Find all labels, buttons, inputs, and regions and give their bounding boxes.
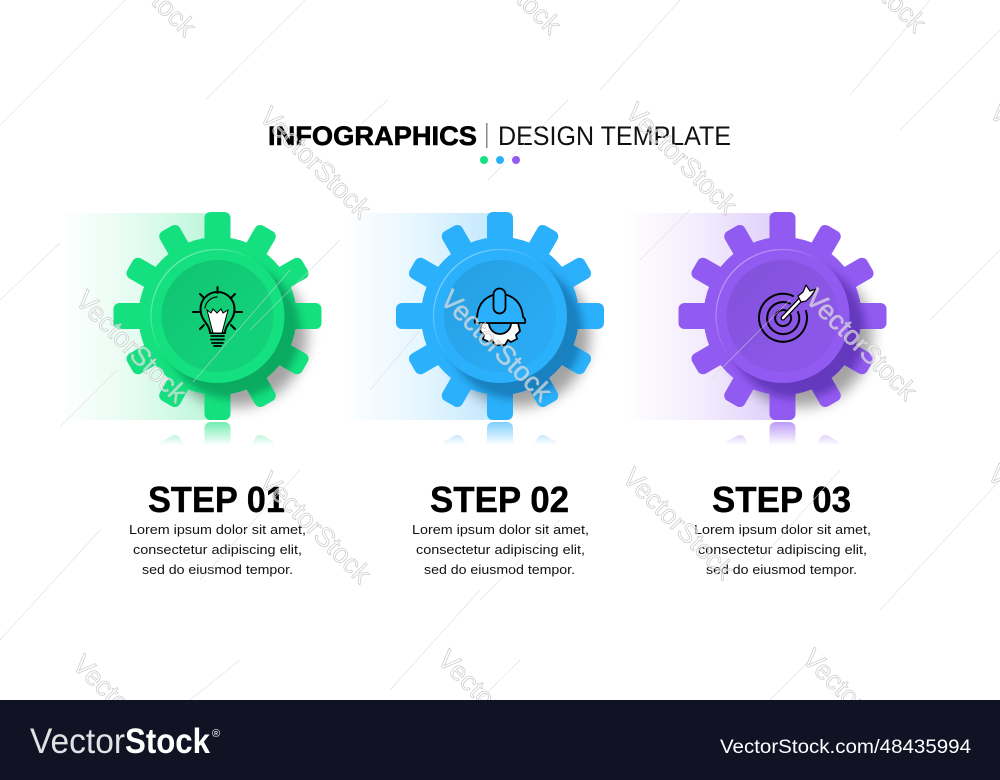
watermarks: VectorStock <box>432 644 555 767</box>
step 01 text: Lorem ipsum dolor sit amet, <box>129 522 306 537</box>
step 03 text <box>694 479 871 577</box>
footer logo <box>30 722 220 761</box>
panel: step 01 gear <box>83 212 322 444</box>
step 02 text: consectetur adipiscing elit, <box>416 542 585 557</box>
icon: light bulb <box>193 287 242 346</box>
green fade band <box>60 213 218 420</box>
watermarks: VectorStock <box>254 466 377 589</box>
footer url: VectorStock.com/48435994 <box>720 737 971 758</box>
step 02 text: sed do eiusmod tempor. <box>424 562 575 577</box>
step 01 text <box>129 479 306 577</box>
watermarks: VectorStock <box>70 285 193 408</box>
watermarks: VectorStock <box>67 649 190 772</box>
reflection fade <box>672 420 892 448</box>
title: INFOGRAPHICS <box>268 121 477 151</box>
gear shadow <box>163 263 307 407</box>
panel: step 03 gear <box>657 212 886 444</box>
panel: step 02 gear <box>367 212 604 444</box>
footer logo: ® <box>212 728 220 740</box>
icon: target with dart <box>759 285 816 342</box>
step 03 text: consectetur adipiscing elit, <box>698 542 867 557</box>
purple fade band <box>625 213 783 420</box>
title: DESIGN TEMPLATE <box>498 121 731 151</box>
watermarks: VectorStock <box>797 643 920 766</box>
gear reflection <box>160 422 275 444</box>
watermarks: VectorStock <box>617 462 740 585</box>
watermarks: VectorStock <box>254 101 377 224</box>
step 02 text <box>412 479 589 577</box>
title <box>268 121 731 151</box>
footer bar <box>0 700 1000 780</box>
green gear <box>114 212 322 420</box>
step 02 text: Lorem ipsum dolor sit amet, <box>412 522 589 537</box>
reflection fade <box>390 420 610 448</box>
step 01 text: consectetur adipiscing elit, <box>133 542 302 557</box>
icon: hard hat with cog <box>475 288 525 345</box>
gear reflection <box>726 422 840 444</box>
step 01 text: sed do eiusmod tempor. <box>142 562 293 577</box>
step 03 text: Lorem ipsum dolor sit amet, <box>694 522 871 537</box>
gear shadow <box>728 263 872 407</box>
blue fade band <box>342 213 500 420</box>
gear reflection <box>443 422 557 444</box>
blue gear <box>396 212 604 420</box>
watermarks: VectorStock <box>800 283 923 406</box>
footer logo: Stock <box>125 722 210 761</box>
step 01 text: STEP 01 <box>148 479 285 520</box>
title colour dots <box>480 156 520 164</box>
watermarks: VectorStock <box>435 284 558 407</box>
footer logo: Vector <box>30 722 125 761</box>
step 02 text: STEP 02 <box>430 479 569 520</box>
purple gear <box>678 212 886 420</box>
reflection fade <box>107 420 327 448</box>
step 03 text: sed do eiusmod tempor. <box>706 562 857 577</box>
step 03 text: STEP 03 <box>712 479 851 520</box>
gear shadow <box>446 263 590 407</box>
watermarks: VectorStock <box>620 97 743 220</box>
